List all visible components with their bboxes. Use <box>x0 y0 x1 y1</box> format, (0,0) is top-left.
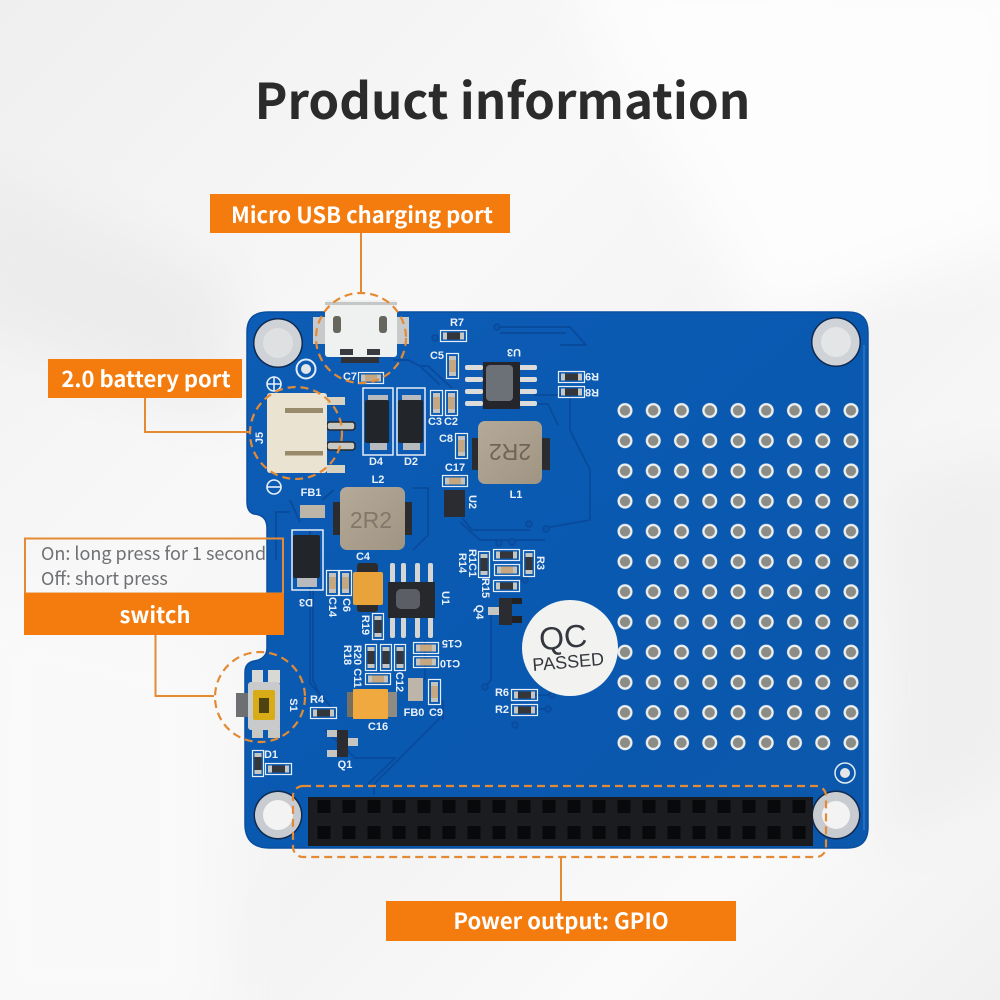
QC passed sticker: QC <box>538 617 589 657</box>
silkscreen labels: D2 <box>404 456 418 468</box>
callout: GPIO power output <box>293 786 826 941</box>
QC passed sticker: PASSED <box>532 649 605 675</box>
silkscreen labels: L1 <box>510 489 522 501</box>
silkscreen labels: FB1 <box>301 487 321 499</box>
traces <box>276 327 590 795</box>
silkscreen labels: C8 <box>439 433 453 445</box>
silkscreen labels: R19 <box>359 615 371 635</box>
callout: battery port <box>48 359 342 479</box>
silkscreen labels: C6 <box>340 598 352 612</box>
silkscreen labels: C9 <box>429 707 443 719</box>
silkscreen labels: R20 <box>351 645 363 665</box>
small resistors <box>252 330 584 776</box>
tactile switch S1 <box>236 670 280 738</box>
callout: switch: Off: short press <box>41 565 168 591</box>
silkscreen labels: C10 <box>440 657 460 669</box>
callout: battery port: 2.0 battery port <box>61 362 231 394</box>
tantalum capacitors <box>347 563 397 719</box>
chip U1 <box>388 563 435 638</box>
silkscreen labels: J5 <box>254 432 266 444</box>
silkscreen labels: R7 <box>450 317 464 329</box>
silkscreen labels: R2 <box>495 704 509 716</box>
callout: GPIO power output: Power output: GPIO <box>453 904 669 936</box>
battery connector J5 <box>267 393 355 473</box>
silkscreen labels: U1 <box>439 591 451 605</box>
silkscreen labels: U2 <box>466 495 478 509</box>
mounting holes <box>253 317 861 840</box>
silkscreen labels: C3 <box>428 416 442 428</box>
silkscreen labels: R1C1 <box>466 549 478 577</box>
board outline <box>245 312 868 848</box>
circuit board <box>236 300 868 848</box>
callout: micro USB <box>210 194 510 383</box>
micro USB port <box>313 300 409 363</box>
silkscreen labels: C17 <box>445 462 465 474</box>
silkscreen labels: C12 <box>393 672 405 692</box>
silkscreen labels: C15 <box>442 637 462 649</box>
callout: switch <box>24 538 305 742</box>
inductor L1: 2R2 <box>489 439 531 465</box>
silkscreen labels: C5 <box>430 350 444 362</box>
silkscreen labels: FB0 <box>404 707 424 719</box>
silkscreen labels: C16 <box>368 721 388 733</box>
silkscreen labels: R6 <box>495 687 509 699</box>
silkscreen labels: C4 <box>356 551 371 563</box>
small passive components <box>326 354 520 704</box>
silkscreen labels: Q4 <box>473 605 485 620</box>
silkscreen labels: D3 <box>299 596 313 608</box>
QC passed sticker <box>522 600 618 696</box>
silkscreen labels: S1 <box>287 698 299 712</box>
silkscreen labels: C11 <box>351 668 363 688</box>
silkscreen labels: Q1 <box>338 759 352 771</box>
silkscreen labels: C2 <box>444 416 458 428</box>
silkscreen labels: R3 <box>534 556 546 570</box>
silkscreen labels: D1 <box>264 749 278 761</box>
silkscreen labels: D4 <box>369 456 384 468</box>
silkscreen labels: R14 <box>456 553 468 574</box>
chip U3 <box>465 362 537 409</box>
silkscreen labels: R8 <box>585 386 599 398</box>
title: Product information <box>255 63 750 134</box>
vias <box>432 324 555 728</box>
inductor L2: 2R2 <box>350 507 392 533</box>
callout: switch: On: long press for 1 second <box>41 540 266 566</box>
silkscreen labels: R4 <box>310 694 325 706</box>
small chips and transistors <box>327 490 522 757</box>
callout: switch: switch <box>119 598 191 630</box>
plus and minus marks <box>267 377 281 494</box>
callout: micro USB: Micro USB charging port <box>231 198 493 230</box>
silkscreen labels <box>254 317 599 771</box>
inductor L2 <box>333 487 412 550</box>
silkscreen labels: C7 <box>343 371 357 383</box>
silkscreen labels: R18 <box>341 645 353 665</box>
silkscreen labels: R9 <box>585 370 599 382</box>
silkscreen labels: L2 <box>372 474 384 486</box>
silkscreen labels: U3 <box>507 346 521 358</box>
diodes <box>292 388 425 590</box>
inductor L1 <box>472 421 550 484</box>
silkscreen labels: R15 <box>479 578 491 598</box>
prototyping hole grid <box>611 395 865 757</box>
silkscreen labels: C14 <box>326 597 338 618</box>
GPIO header <box>308 797 813 846</box>
